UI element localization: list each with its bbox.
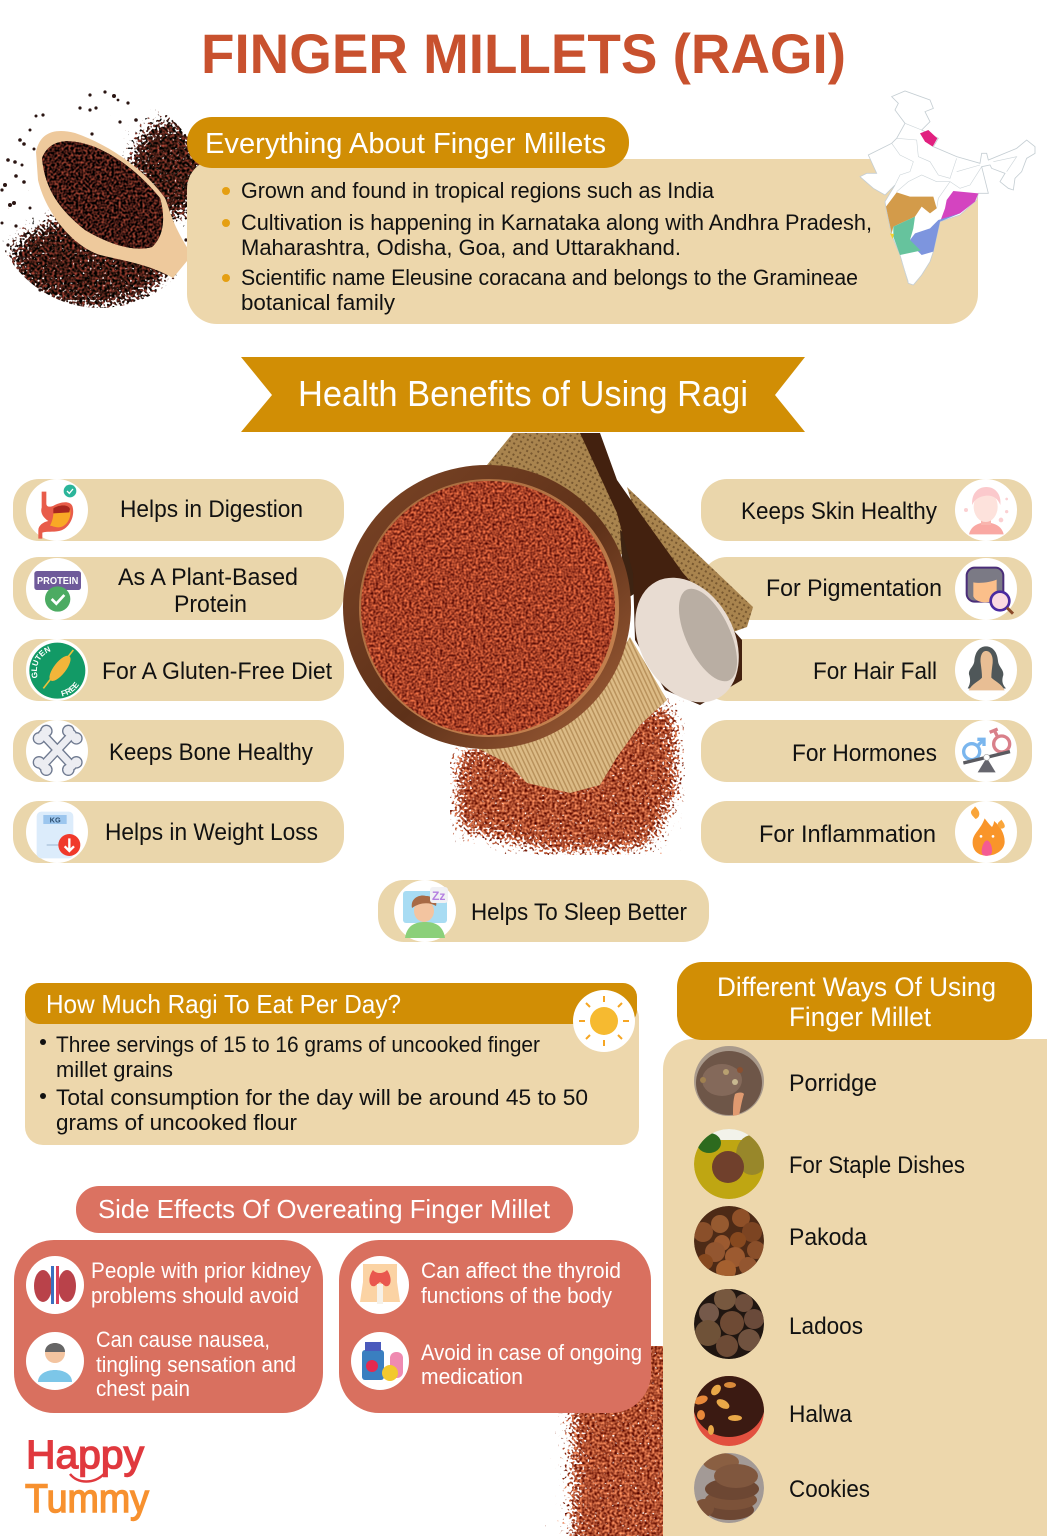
heading: everything about finger millets: [187, 117, 629, 168]
heading: different ways: Finger Millet: [789, 1002, 931, 1032]
panel: side effects left: [14, 1240, 323, 1413]
label text left: Keeps Bone Healthy: [109, 739, 313, 766]
icon: gluten free: FREE: [61, 682, 79, 696]
bullet text: daily amount: [40, 1032, 588, 1135]
logo: Happy Tummy: Happy: [26, 1433, 144, 1477]
icon: stomach: [38, 485, 76, 539]
item: staple dishes: [694, 1126, 965, 1199]
icon: protein: [34, 571, 81, 612]
item: staple dishes: For Staple Dishes: [789, 1152, 965, 1179]
bullet list: about finger millets: Cultivation is happening in Karnataka along with Andhra Pradesh,: [241, 210, 872, 235]
ribbon heading: health benefits: Health Benefits of Using Ragi: [298, 373, 748, 414]
icon: protein: PROTEIN: [37, 576, 78, 587]
bullet list: about finger millets: Scientific name Eleusine coracana and belongs to the Gramineae: [241, 265, 858, 290]
title: FINGER MILLETS (RAGI): [201, 22, 846, 85]
text: side effects left: chest pain: [96, 1376, 190, 1401]
panel: everything about finger millets: [187, 91, 1035, 324]
benefit pills right: [701, 479, 1032, 863]
logo: Happy Tummy: [25, 1433, 149, 1521]
text: side effects right: medication: [421, 1364, 523, 1389]
text: side effects left: [91, 1258, 311, 1401]
icon: hormones: [963, 729, 1010, 772]
heading: everything about finger millets: Everything About Finger Millets: [205, 128, 606, 160]
text: side effects left: problems should avoid: [91, 1283, 299, 1308]
benefit pill: sleep better: [378, 880, 709, 942]
text: side effects left: tingling sensation and: [96, 1352, 296, 1377]
text: side effects right: Can affect the thyroid: [421, 1258, 621, 1283]
label text right: For Hair Fall: [813, 658, 937, 685]
icon: gluten free: GLUTEN: [31, 646, 50, 678]
ribbon heading: health benefits: [241, 357, 805, 432]
image: bowl of ragi with burlap and flour spoon: [343, 433, 759, 855]
panel: different ways of using: [663, 962, 1047, 1536]
icon: sleeping person: [403, 887, 448, 938]
bullet text: daily amount: Three servings of 15 to 16 grams of uncooked finger: [56, 1032, 540, 1057]
benefit pill: sleep better: Helps To Sleep Better: [471, 899, 687, 926]
heading: different ways: Different Ways Of Using: [717, 972, 996, 1002]
icon: hair: [968, 646, 1006, 690]
map of India: [860, 91, 1035, 285]
benefit pills left: [13, 479, 344, 863]
image: dark millet in wooden scoop: [0, 90, 208, 310]
panel: how much ragi per day: [25, 983, 639, 1145]
item: pakoda: [693, 1206, 868, 1280]
icon: sun: [573, 990, 635, 1052]
bullet list: about finger millets: botanical family: [241, 290, 395, 315]
bullet list: about finger millets: Grown and found in tropical regions such as India: [241, 178, 715, 203]
text: side effects left: Can cause nausea,: [96, 1327, 270, 1352]
label text right: For Inflammation: [759, 821, 936, 848]
label text left: For A Gluten-Free Diet: [102, 658, 332, 685]
text: side effects right: Avoid in case of ongoing: [421, 1340, 642, 1365]
bullet list: about finger millets: [222, 178, 872, 315]
heading: side effects: Side Effects Of Overeating Finger Millet: [98, 1194, 551, 1224]
bullet text: daily amount: millet grains: [56, 1057, 173, 1082]
bullet text: daily amount: grams of uncooked flour: [56, 1110, 297, 1135]
heading: how much ragi: How Much Ragi To Eat Per Day?: [46, 989, 401, 1019]
logo: Happy Tummy: Tummy: [25, 1477, 149, 1521]
label text right: For Hormones: [792, 740, 937, 767]
panel: side effects right: [339, 1240, 651, 1413]
icon: skin face: [964, 487, 1008, 534]
label text right: [741, 498, 942, 848]
icon: kidneys: [34, 1266, 76, 1304]
image: scattered ragi bottom: [545, 1346, 663, 1536]
heading: different ways: [677, 962, 1032, 1040]
label text left: As A Plant-Based: [118, 564, 298, 591]
icon: medicine: [362, 1342, 403, 1381]
icon: nausea person: [38, 1343, 72, 1382]
icon: weight scale: [37, 812, 80, 858]
text: side effects right: [421, 1258, 642, 1389]
label text right: Keeps Skin Healthy: [741, 498, 937, 525]
label text left: [102, 496, 332, 846]
bullet text: daily amount: Total consumption for the day will be around 45 to 50: [56, 1085, 588, 1110]
icon: pigmentation: [967, 568, 1013, 614]
item: ladoos: [694, 1288, 863, 1359]
icon: weight scale: KG: [50, 815, 61, 824]
icon: sleeping person: Zz: [432, 889, 445, 903]
item: cookies: [694, 1453, 870, 1523]
item: halwa: [693, 1371, 853, 1446]
text: side effects right: functions of the body: [421, 1283, 612, 1308]
label text right: For Pigmentation: [766, 575, 942, 602]
item: porridge: Porridge: [789, 1070, 877, 1097]
item: cookies: Cookies: [789, 1476, 870, 1503]
label text left: Protein: [174, 591, 247, 618]
item: pakoda: Pakoda: [789, 1224, 868, 1251]
text: side effects left: People with prior kidney: [91, 1258, 311, 1283]
wooden scoop: [36, 131, 192, 278]
label text left: Helps in Digestion: [120, 496, 303, 523]
icon: inflammation flame: [971, 806, 1005, 856]
heading: side effects: [76, 1186, 573, 1233]
item: ladoos: Ladoos: [789, 1313, 863, 1340]
item: porridge: [694, 1046, 877, 1116]
heading: how much ragi: [25, 983, 637, 1024]
icon: gluten free: [29, 642, 86, 699]
label text left: Helps in Weight Loss: [105, 819, 318, 846]
item: halwa: Halwa: [789, 1401, 853, 1428]
bullet list: about finger millets: Maharashtra, Odisha, Goa, and Uttarakhand.: [241, 235, 681, 260]
icon: crossed bones: [33, 725, 83, 776]
icon: thyroid: [360, 1264, 400, 1304]
